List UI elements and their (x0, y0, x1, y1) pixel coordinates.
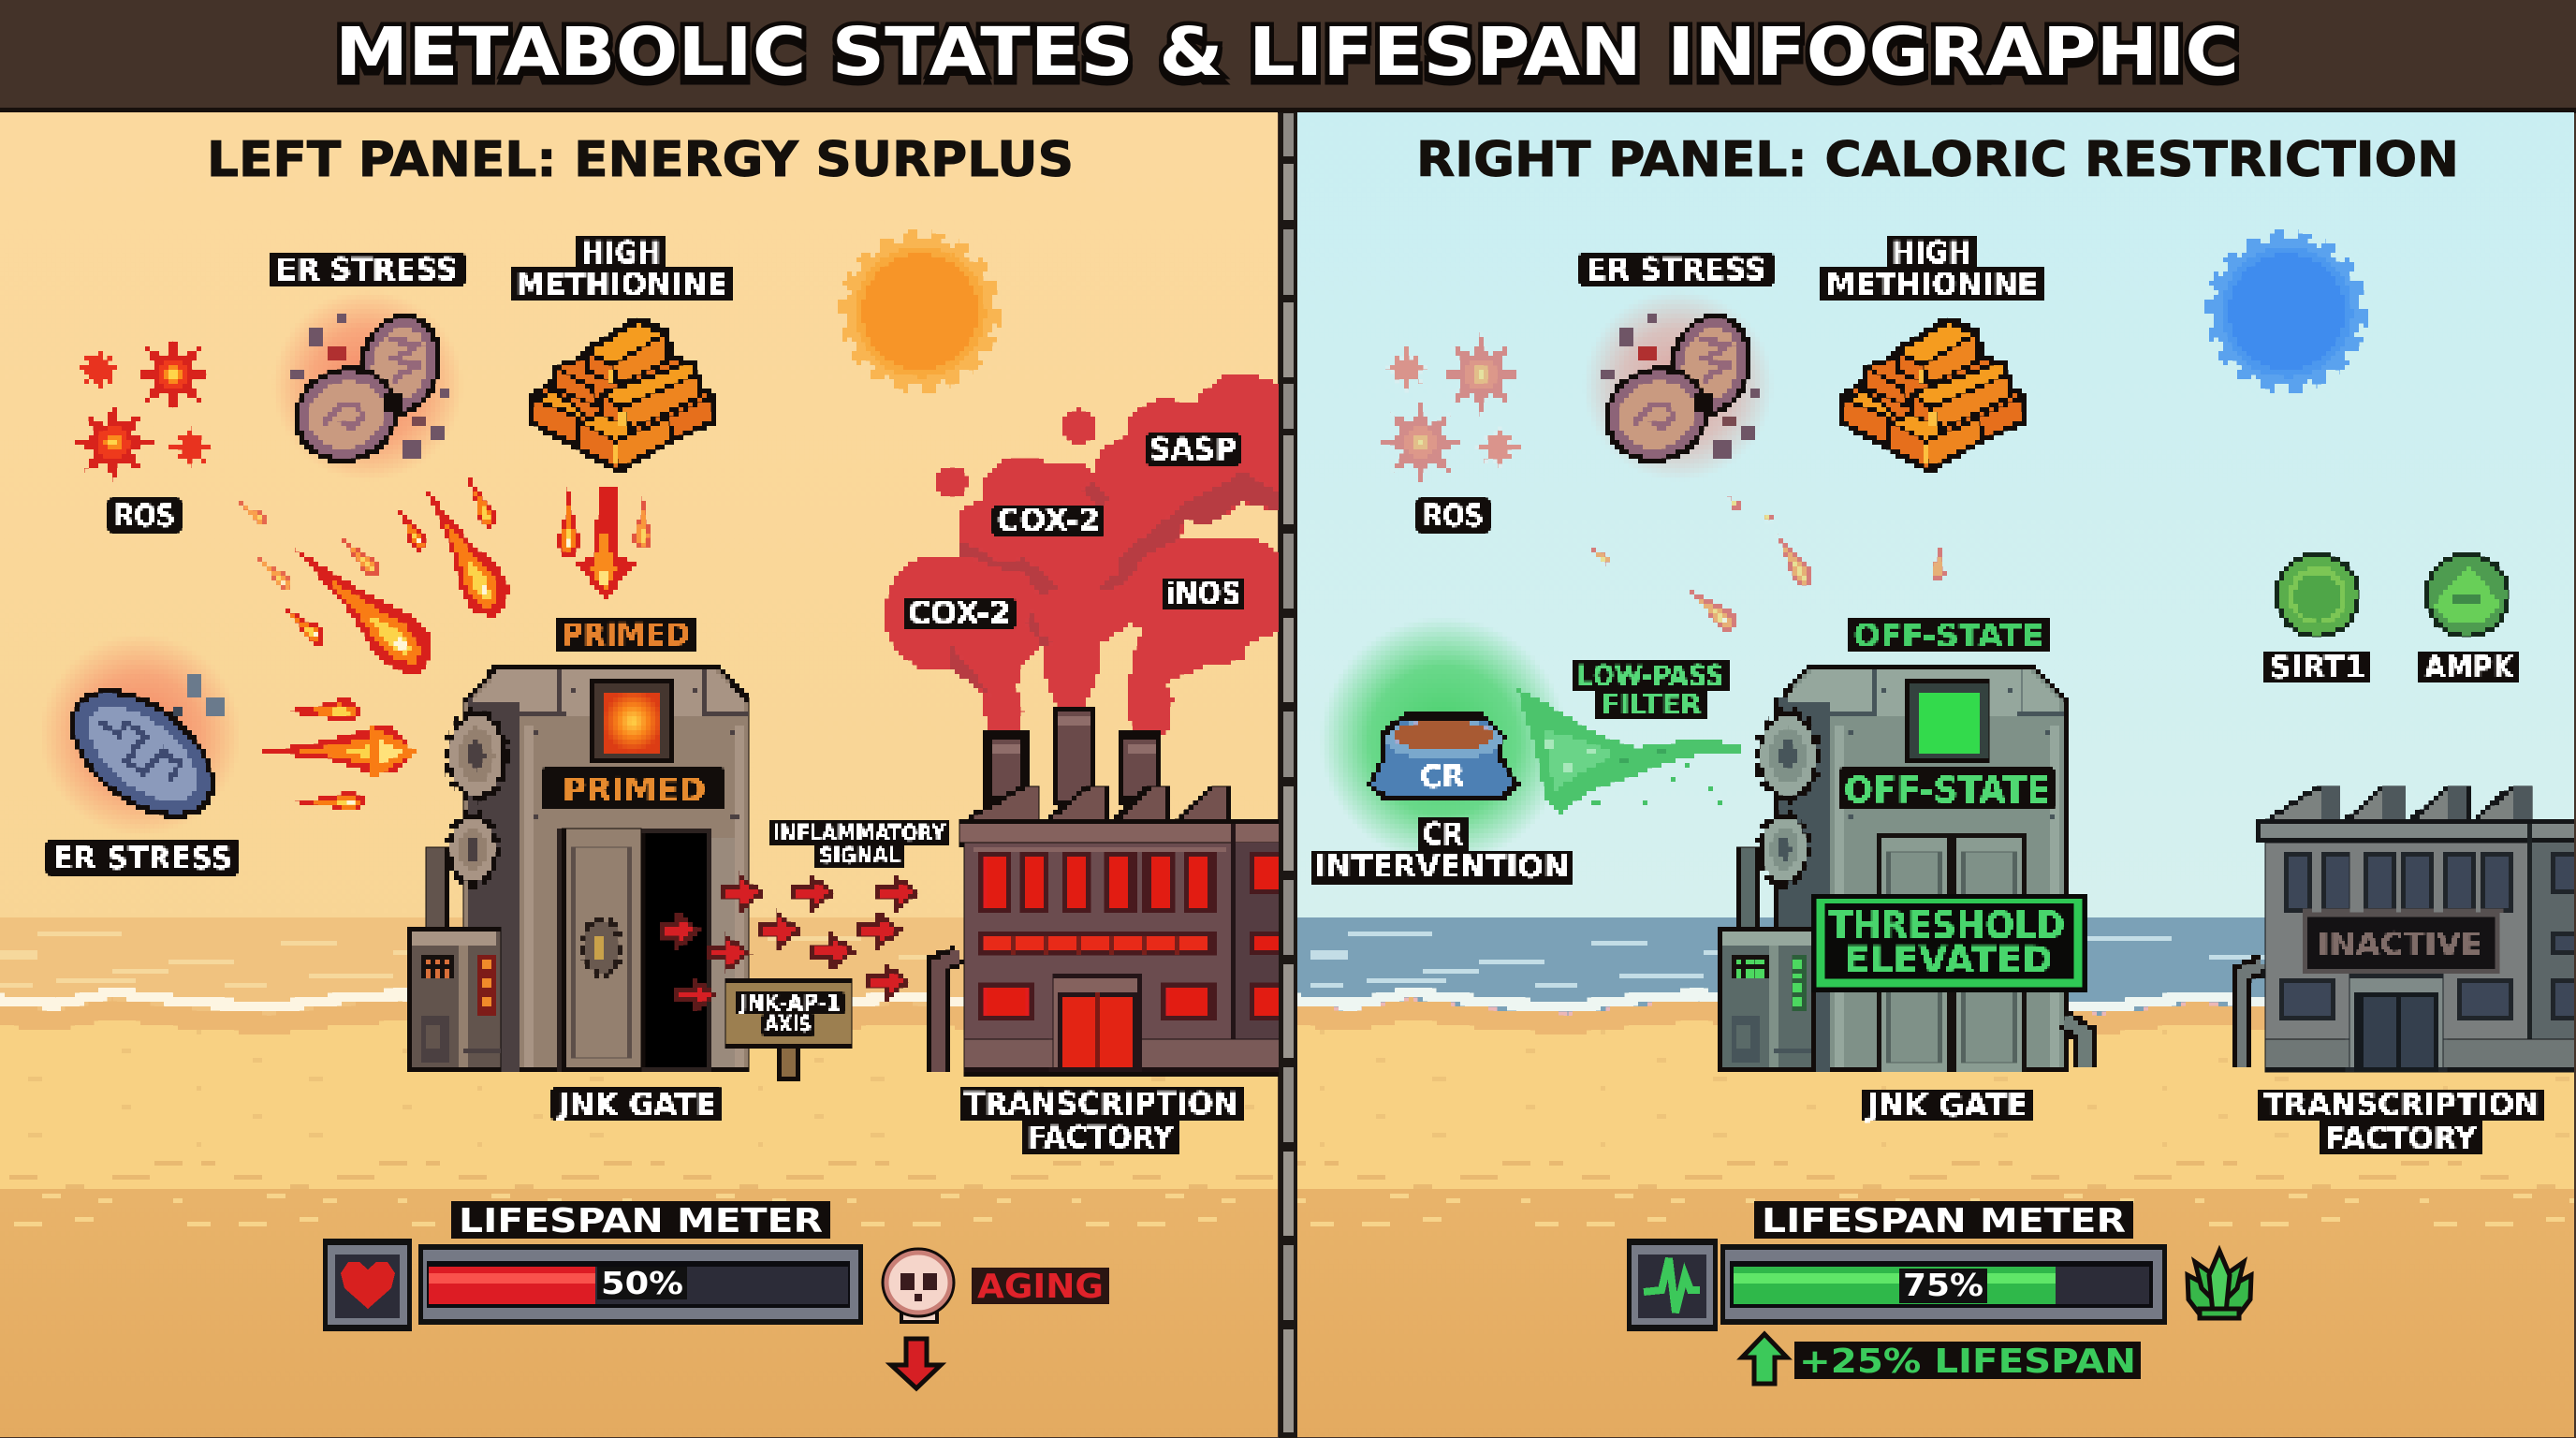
lifespan meter right (1627, 1201, 2167, 1331)
gate open door (558, 829, 735, 1070)
label: iNOS: iNOS (1165, 575, 1241, 611)
icon: faded ROS sparks (1380, 333, 1522, 484)
sign: JNK-AP-1 axis (725, 982, 852, 1078)
arrow: low-pass green stream (1516, 687, 1741, 814)
label: CR on bowl: CR (1420, 758, 1465, 796)
label: primed above gate: PRIMED (562, 616, 690, 653)
value: 50 percent: 50% (601, 1265, 683, 1301)
left labels (46, 234, 1245, 1155)
label: SIRT1: SIRT1 (2269, 649, 2365, 685)
label: aging: AGING (977, 1268, 1104, 1306)
label: threshold elevated: ELEVATED (1844, 939, 2053, 982)
label: off-state above gate: OFF-STATE (1853, 617, 2043, 653)
left panel heading: LEFT PANEL: ENERGY SURPLUS (207, 132, 1074, 188)
label: inactive: INACTIVE (2318, 926, 2482, 963)
label: ER stress top: ER STRESS (276, 251, 458, 287)
label: ROS: ROS (114, 497, 175, 534)
icon: methionine gold bars (530, 318, 714, 472)
label: inflammatory signal (769, 820, 949, 869)
label: transcription factory: TRANSCRIPTION (2263, 1086, 2539, 1123)
left scene art (0, 112, 1292, 1438)
label: inflammatory signal: SIGNAL (819, 843, 900, 869)
panel: left energy surplus (0, 112, 1292, 1438)
label: ROS: ROS (1423, 497, 1484, 534)
icon: blue mitochondrion glow (47, 641, 234, 829)
right labels (1310, 234, 2544, 1156)
label: transcription factory (959, 1085, 1243, 1155)
label: JNK gate: JNK GATE (1866, 1087, 2027, 1123)
label: high methionine (510, 234, 733, 302)
meter bar 50 percent (418, 1244, 863, 1325)
smoke plumes (883, 376, 1292, 737)
label: CR intervention: CR (1423, 815, 1463, 852)
label: JNK-AP-1 axis: AXIS (765, 1011, 812, 1037)
right scene art (1297, 112, 2576, 1438)
label: lifespan meter: LIFESPAN METER (459, 1202, 823, 1240)
arrow: lifespan falling (891, 1339, 941, 1388)
arrows: fireballs toward gate (235, 470, 651, 812)
label: JNK gate: JNK GATE (556, 1086, 716, 1123)
right panel heading: RIGHT PANEL: CALORIC RESTRICTION (1416, 132, 2459, 188)
label: COX-2 upper: COX-2 (997, 502, 1100, 538)
icon: green sprout (2188, 1251, 2251, 1318)
control indicator (424, 954, 495, 1014)
icon: ER stress mitochondrion (70, 674, 225, 819)
meter bar 75 percent (1720, 1244, 2167, 1325)
value: 75 percent: 75% (1903, 1267, 1983, 1303)
icon: CR glow (1320, 617, 1567, 864)
label: threshold elevated: THRESHOLD (1829, 904, 2065, 947)
icon: skull (884, 1250, 953, 1322)
icon: heart box (323, 1239, 412, 1331)
icon: damaged mitochondrion glow (281, 295, 459, 473)
icon: organelle glow (1583, 290, 1774, 481)
gate outflow pipe (2065, 1020, 2086, 1067)
label: low-pass filter: LOW-PASS (1577, 660, 1724, 693)
aging status (884, 1250, 1109, 1388)
icon: AMPK (2426, 554, 2509, 637)
lifespan meter left (323, 1201, 863, 1331)
gate closed doors (1875, 832, 2027, 1071)
divider between panels (1279, 112, 1297, 1438)
icon: ER stress organelle (1594, 307, 1762, 475)
label: JNK-AP-1 axis (736, 990, 844, 1037)
icon: ER stress organelle (290, 314, 449, 463)
label: AMPK: AMPK (2424, 649, 2515, 685)
label: transcription factory (2259, 1086, 2544, 1156)
label: transcription factory: TRANSCRIPTION (964, 1085, 1238, 1122)
gate window glowing (593, 682, 672, 760)
icon: orange sun (847, 239, 993, 385)
panel: right caloric restriction (1297, 112, 2576, 1438)
label: primed panel on gate: PRIMED (563, 771, 706, 810)
label: off-state panel: OFF-STATE (1844, 770, 2050, 811)
icon: ROS sparks (75, 341, 212, 482)
threshold elevated panel frame (1813, 892, 2086, 991)
label: high methionine (1821, 234, 2043, 302)
label: low-pass filter (1573, 660, 1729, 722)
label: CR intervention (1310, 815, 1573, 885)
label: low-pass filter: FILTER (1601, 689, 1702, 722)
label: ER stress: ER STRESS (1587, 251, 1766, 287)
transcription factory active (939, 709, 1285, 1073)
control indicator green (1734, 953, 1807, 1011)
label: high methionine: HIGH (1892, 234, 1971, 271)
icon: blue sun (2214, 239, 2360, 385)
transcription factory inactive (2242, 786, 2576, 1072)
label: SASP: SASP (1149, 431, 1237, 467)
label: +25% lifespan: +25% LIFESPAN (1799, 1343, 2136, 1381)
gate green light (1908, 682, 1989, 760)
label: ER stress left: ER STRESS (53, 840, 232, 876)
JNK gate primed (409, 668, 749, 1071)
title bar (0, 0, 2576, 113)
label: transcription factory: FACTORY (2325, 1120, 2478, 1156)
label: high methionine: HIGH (581, 234, 661, 271)
arrows: inflammatory signal (662, 876, 917, 1010)
icon: CR food bowl (1369, 716, 1517, 799)
label: COX-2 lower: COX-2 (908, 594, 1011, 631)
lifespan gain status (1742, 1251, 2251, 1384)
arrows: faded fireballs (1587, 490, 1946, 635)
label: threshold elevated (1829, 904, 2065, 982)
JNK gate off-state (1720, 668, 2065, 1071)
icon: pulse box (1627, 1239, 1718, 1331)
label: CR intervention: INTERVENTION (1315, 848, 1569, 885)
title: METABOLIC STATES & LIFESPAN INFOGRAPHIC (335, 13, 2239, 91)
label: lifespan meter: LIFESPAN METER (1762, 1202, 2126, 1240)
icon: SIRT1 (2276, 554, 2359, 637)
label: JNK-AP-1 axis: JNK-AP-1 (738, 990, 841, 1016)
label: transcription factory: FACTORY (1027, 1119, 1175, 1155)
label: high methionine: METHIONINE (1826, 266, 2038, 302)
arrow: lifespan rising (1742, 1334, 1787, 1384)
label: inflammatory signal: INFLAMMATORY (773, 820, 946, 846)
label: high methionine: METHIONINE (516, 266, 727, 302)
icon: methionine gold bars (1840, 318, 2025, 472)
